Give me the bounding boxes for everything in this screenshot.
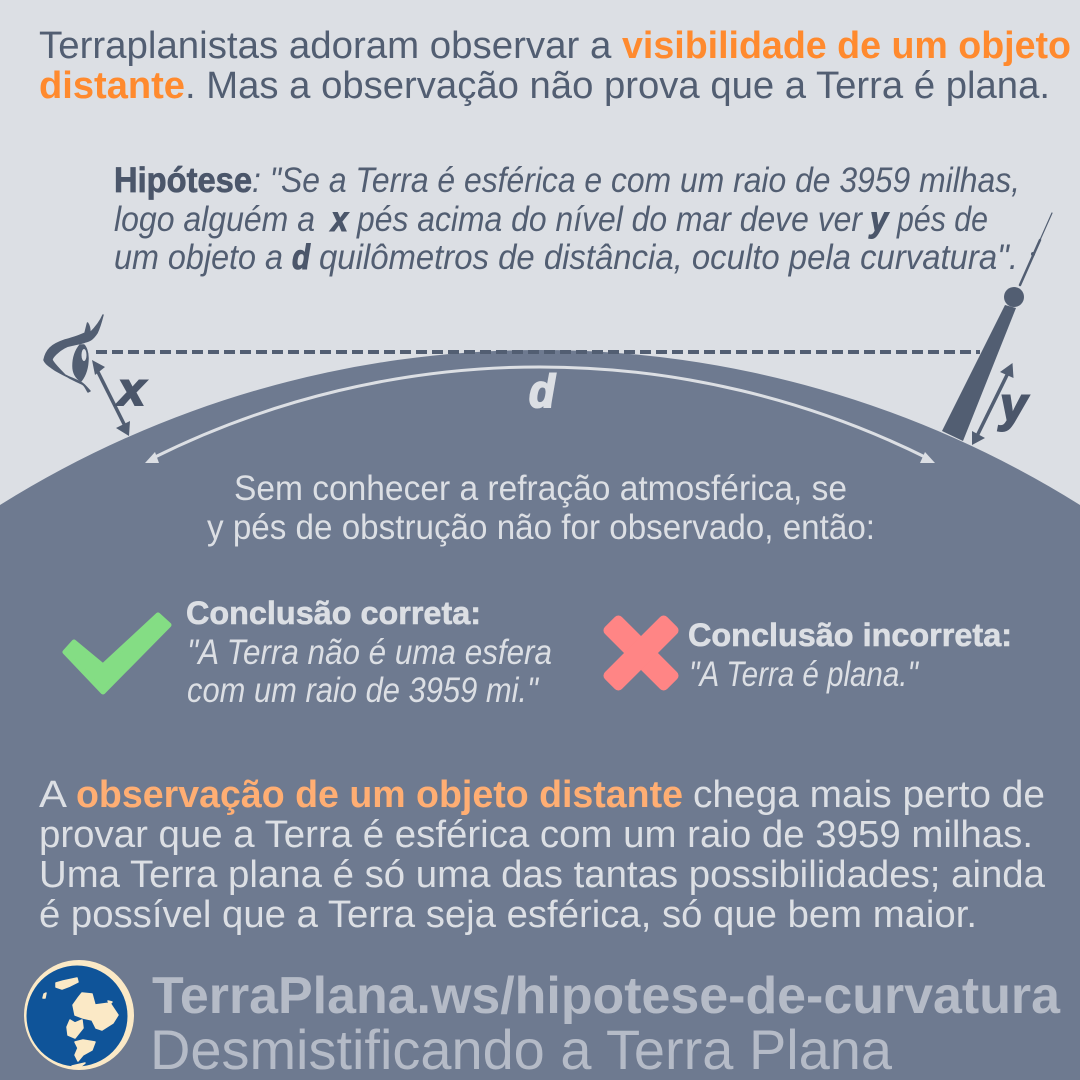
refraction text: Sem conhecer a refração atmosférica, se bbox=[234, 469, 847, 508]
explanation paragraph: A bbox=[39, 774, 68, 816]
incorrect conclusion: "A Terra é plana." bbox=[689, 655, 919, 694]
incorrect conclusion bbox=[688, 617, 1012, 694]
hypothesis text: y bbox=[868, 200, 889, 239]
hypothesis text: : "Se a Terra é esférica e com um raio de 3959 milhas, bbox=[252, 161, 1020, 200]
icon: eye bbox=[44, 315, 103, 392]
icon: green check bbox=[65, 615, 169, 692]
hypothesis text: x bbox=[329, 200, 349, 239]
line of sight bbox=[96, 350, 980, 354]
title: distante bbox=[39, 65, 185, 107]
label: y: y bbox=[998, 379, 1029, 432]
icon: tower bbox=[942, 213, 1052, 441]
hypothesis text: Hipótese bbox=[114, 161, 252, 200]
title: . Mas a observação não prova que a Terra é plana. bbox=[185, 65, 1050, 107]
correct conclusion bbox=[186, 595, 552, 710]
hypothesis text: quilômetros de distância, oculto pela curvatura". bbox=[319, 238, 1018, 277]
explanation paragraph: chega mais perto de bbox=[693, 774, 1045, 816]
title: visibilidade de um objeto bbox=[622, 25, 1071, 67]
incorrect conclusion: Conclusão incorreta: bbox=[688, 617, 1012, 653]
hypothesis text: pés acima do nível do mar deve ver bbox=[356, 200, 863, 239]
hypothesis text: um objeto a bbox=[114, 238, 283, 277]
correct conclusion: com um raio de 3959 mi." bbox=[187, 671, 539, 710]
footer tagline: Desmistificando a Terra Plana bbox=[150, 1018, 893, 1080]
title: Terraplanistas adoram observar a bbox=[39, 25, 622, 67]
icon: red cross bbox=[601, 613, 681, 693]
title bbox=[39, 25, 1071, 107]
correct conclusion: "A Terra não é uma esfera bbox=[187, 633, 552, 672]
footer url: TerraPlana.ws/hipotese-de-curvatura bbox=[152, 967, 1061, 1025]
arrow: height y bbox=[972, 363, 1014, 445]
arrow: distance d bbox=[145, 367, 935, 463]
refraction text: y pés de obstrução não for observado, então: bbox=[207, 508, 875, 547]
explanation paragraph bbox=[39, 774, 1046, 936]
explanation paragraph: é possível que a Terra seja esférica, só que bem maior. bbox=[39, 894, 977, 936]
explanation paragraph: provar que a Terra é esférica com um raio de 3959 milhas. bbox=[39, 814, 1033, 856]
hypothesis text: d bbox=[292, 238, 311, 277]
label: x: x bbox=[115, 363, 148, 415]
correct conclusion: Conclusão correta: bbox=[186, 595, 481, 631]
earth curve bbox=[0, 350, 1080, 1080]
icon: flat earth logo bbox=[24, 960, 134, 1070]
label: d: d bbox=[529, 365, 556, 417]
explanation paragraph: Uma Terra plana é só uma das tantas possibilidades; ainda bbox=[39, 854, 1046, 896]
hypothesis text: pés de bbox=[896, 200, 988, 239]
arrow: height x bbox=[92, 360, 130, 436]
explanation paragraph: observação de um objeto distante bbox=[76, 774, 683, 816]
hypothesis text bbox=[114, 161, 1020, 277]
refraction text bbox=[207, 469, 875, 547]
hypothesis text: logo alguém a bbox=[114, 200, 315, 239]
